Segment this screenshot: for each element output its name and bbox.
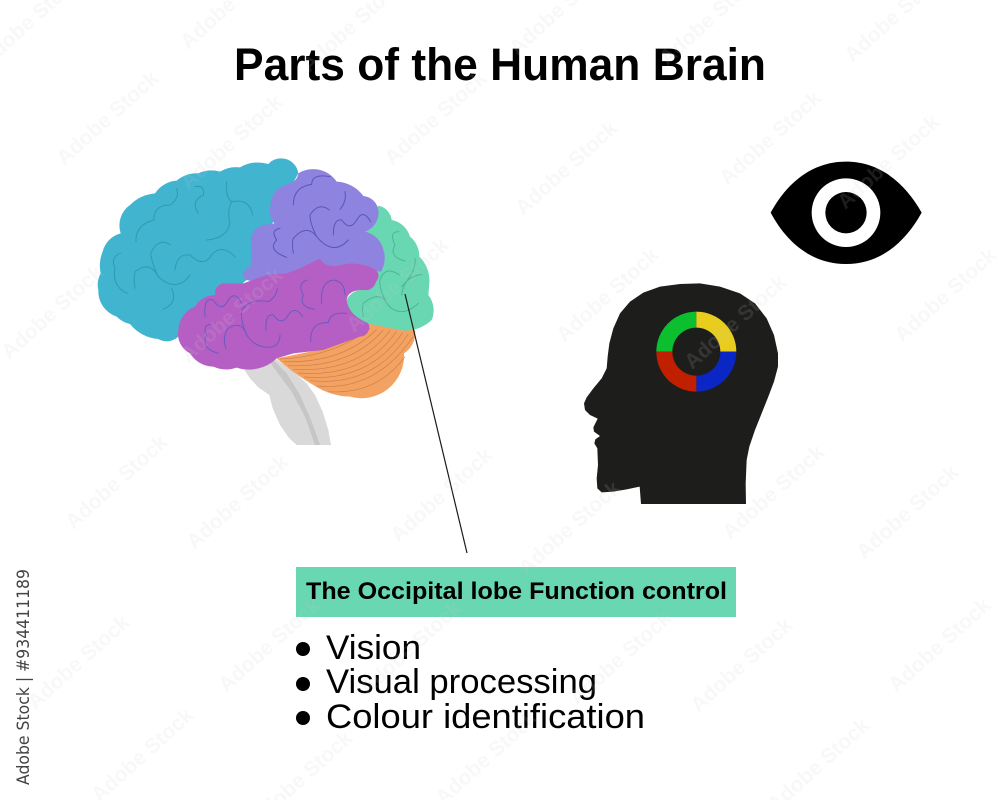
frontal lobe (blue) — [98, 158, 298, 341]
callout heading: occipital lobe — [296, 567, 736, 617]
watermark pattern: Adobe Stock — [342, 233, 453, 337]
function list — [296, 629, 645, 736]
title: Parts of the Human Brain — [234, 39, 766, 90]
watermark pattern: Adobe Stock — [23, 610, 134, 714]
watermark pattern: Adobe Stock — [214, 593, 325, 697]
icon: eye — [771, 162, 922, 264]
occipital lobe (green) — [347, 206, 434, 331]
watermark pattern: Adobe Stock — [680, 270, 791, 374]
watermark pattern: Adobe Stock — [890, 243, 1000, 347]
watermark pattern: Adobe Stock — [552, 243, 663, 347]
function list: Vision — [326, 629, 421, 667]
watermark pattern: Adobe Stock — [182, 450, 293, 554]
parietal lobe (purple) — [243, 169, 385, 281]
brain illustration — [98, 158, 434, 445]
function list: Visual processing — [326, 663, 597, 701]
watermark pattern: Adobe Stock — [852, 460, 963, 564]
watermark pattern: Adobe Stock — [355, 596, 466, 700]
watermark pattern: Adobe Stock — [380, 66, 491, 170]
watermark pattern: Adobe Stock — [514, 476, 625, 580]
icon: head silhouette with colour ring — [584, 283, 778, 504]
watermark pattern: Adobe Stock — [833, 110, 944, 214]
watermark pattern: Adobe Stock — [61, 430, 172, 534]
watermark pattern: Adobe Stock — [686, 613, 797, 717]
function list: Colour identification — [326, 698, 645, 736]
watermark pattern: Adobe Stock — [176, 263, 287, 367]
watermark pattern: Adobe Stock — [386, 443, 497, 547]
watermark pattern: Adobe Stock — [884, 593, 995, 697]
temporal lobe (magenta) — [178, 258, 379, 370]
watermark pattern: Adobe Stock — [52, 66, 163, 170]
watermark pattern: Adobe Stock — [715, 86, 826, 190]
watermark pattern: Adobe Stock — [176, 90, 287, 194]
leader line — [405, 294, 467, 553]
watermark pattern: Adobe Stock — [511, 116, 622, 220]
brain stem — [243, 358, 331, 445]
watermark pattern: Adobe Stock — [718, 440, 829, 544]
watermark pattern: Adobe Stock — [0, 260, 108, 364]
watermark pattern: Adobe Stock — [565, 606, 676, 710]
watermark credit: Adobe Stock | #934411189 — [14, 569, 34, 785]
callout heading: occipital lobe: The Occipital lobe Function control — [306, 578, 727, 605]
cerebellum — [277, 323, 415, 398]
